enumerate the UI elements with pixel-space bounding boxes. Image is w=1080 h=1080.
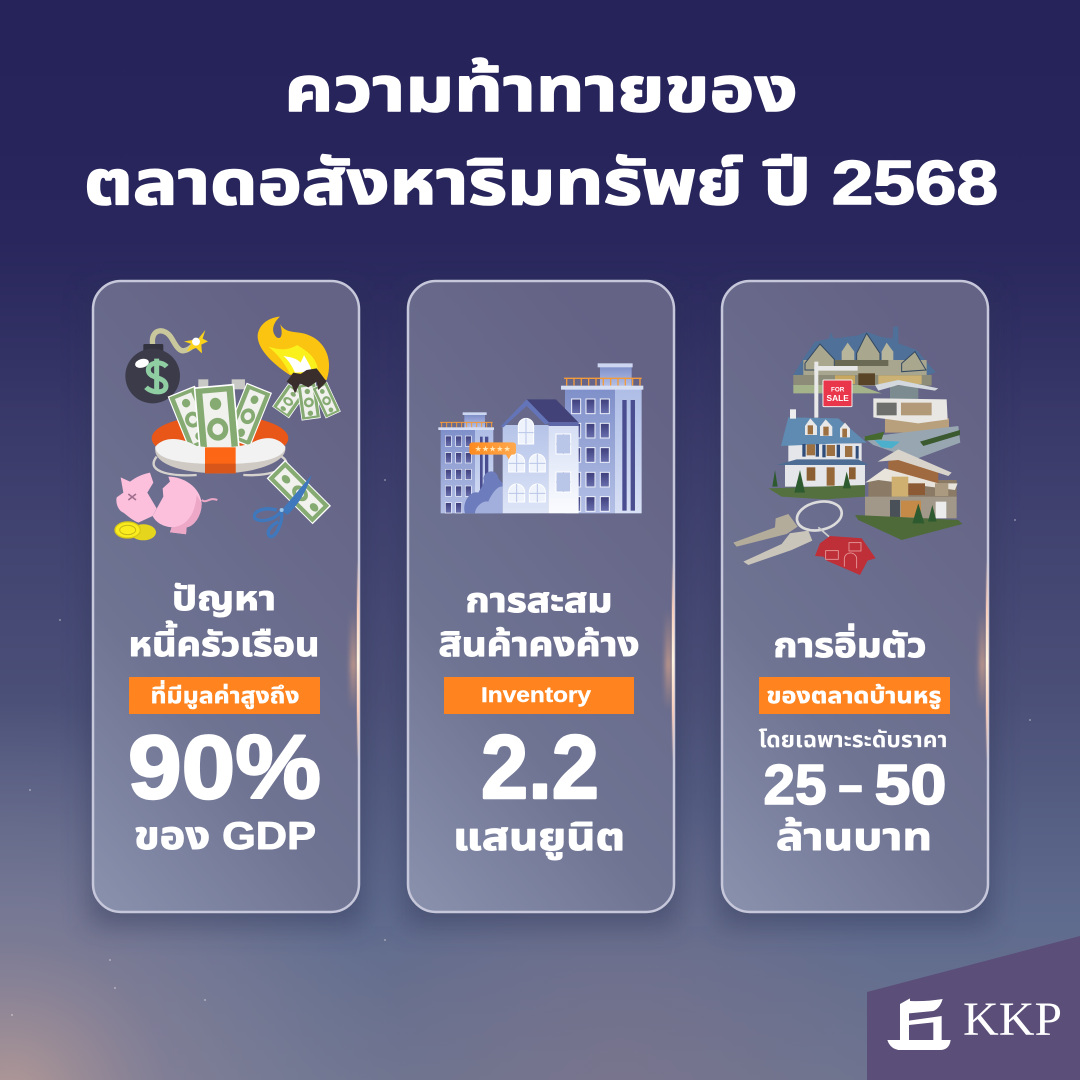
logo wordmark: KKP bbox=[963, 993, 1062, 1046]
glow: card edge bbox=[979, 560, 988, 760]
panel: luxury housing bbox=[722, 281, 988, 912]
blue colonial house bbox=[768, 409, 868, 499]
icon: buildings bbox=[438, 363, 643, 513]
unit: ล้านบาท bbox=[776, 817, 932, 859]
statistic: 25 bbox=[764, 753, 826, 817]
heading: สินค้าคงค้าง bbox=[438, 626, 640, 664]
orange label bbox=[444, 677, 634, 714]
modern two-storey house bbox=[855, 449, 962, 540]
heading: การอิ่มตัว bbox=[774, 623, 926, 665]
icon: broken piggy bank bbox=[115, 473, 217, 540]
panel: household debt bbox=[93, 281, 359, 912]
modern house with pool bbox=[863, 380, 960, 459]
unit: ของ GDP bbox=[134, 815, 316, 858]
rating badge bbox=[469, 442, 516, 459]
heading: ปัญหา bbox=[172, 580, 276, 618]
for sale sign: FOR bbox=[831, 386, 845, 393]
icon: burning bills bbox=[258, 317, 341, 421]
rating badge: ★★★★★ bbox=[475, 444, 511, 453]
for sale sign: SALE bbox=[827, 393, 849, 403]
logo: KKP bbox=[867, 936, 1080, 1080]
left tower bbox=[438, 412, 494, 513]
icon: bomb bbox=[125, 330, 208, 403]
title: ตลาดอสังหาริมทรัพย์ ปี 2568 bbox=[84, 149, 998, 218]
heading bbox=[438, 582, 640, 664]
icon: lifebuoy with cash bbox=[152, 379, 288, 475]
orange label: Inventory bbox=[481, 684, 591, 707]
orange label: ที่มีมูลค่าสูงถึง bbox=[150, 680, 300, 709]
red house key fob bbox=[815, 536, 876, 575]
glow: card edge bbox=[665, 560, 674, 760]
orange label bbox=[759, 677, 950, 714]
title bbox=[84, 56, 998, 218]
icon: scissors cutting bill bbox=[254, 460, 331, 537]
statistic: 50 bbox=[874, 753, 946, 817]
heading: การสะสม bbox=[466, 582, 612, 620]
heading: หนี้ครัวเรือน bbox=[128, 620, 320, 664]
unit: แสนยูนิต bbox=[453, 817, 625, 860]
for sale sign bbox=[814, 362, 858, 418]
orange label bbox=[129, 677, 320, 714]
keys bbox=[733, 498, 844, 565]
icon: houses, for-sale sign and keys bbox=[733, 327, 962, 575]
panel: inventory bbox=[408, 281, 674, 912]
statistic: 2.2 bbox=[481, 718, 599, 818]
statistic: 90% bbox=[128, 718, 321, 818]
right tower bbox=[561, 363, 643, 513]
heading bbox=[128, 580, 320, 664]
statistic bbox=[764, 753, 946, 817]
sub text: โดยเฉพาะระดับราคา bbox=[758, 727, 948, 752]
orange label: ของตลาดบ้านหรู bbox=[766, 683, 942, 709]
logo mark bbox=[887, 998, 951, 1050]
icon: money problems illustration bbox=[115, 317, 341, 540]
statistic: – bbox=[838, 753, 862, 817]
title: ความท้าทายของ bbox=[284, 56, 798, 125]
bush bbox=[464, 471, 503, 513]
middle building bbox=[501, 399, 579, 513]
glow: card edge bbox=[350, 560, 359, 760]
top mansion bbox=[793, 327, 936, 393]
